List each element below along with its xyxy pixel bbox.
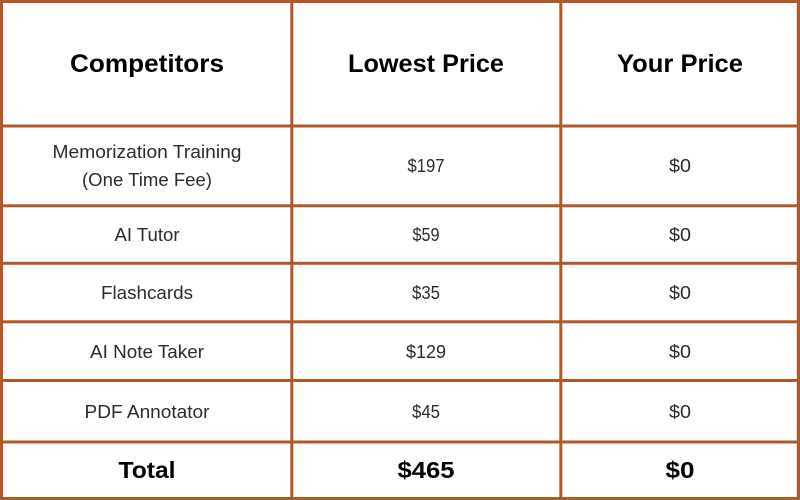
header row — [70, 50, 743, 78]
row: memorization training — [52, 142, 691, 190]
heading: competitors: Competitors — [70, 50, 224, 78]
row: total — [118, 457, 694, 483]
label: one time fee: (One Time Fee) — [82, 170, 212, 190]
your price value: $0 — [669, 342, 691, 362]
lowest price value: $197 — [408, 156, 444, 176]
lowest price value: $59 — [412, 225, 440, 245]
label: total: Total — [118, 457, 176, 483]
your price value: $0 — [669, 283, 691, 303]
row: ai tutor — [114, 225, 691, 245]
label: memorization training: Memorization Training — [52, 142, 242, 162]
heading: your price: Your Price — [617, 50, 743, 78]
lowest price value: $35 — [412, 283, 440, 303]
lowest price value: $45 — [412, 402, 440, 422]
lowest price value: $129 — [406, 342, 446, 362]
your price value: $0 — [669, 156, 691, 176]
row: pdf annotator — [84, 402, 691, 422]
your price value: $0 — [669, 225, 691, 245]
label: pdf annotator: PDF Annotator — [84, 402, 210, 422]
label: ai note taker: AI Note Taker — [90, 342, 204, 362]
label: flashcards: Flashcards — [101, 283, 193, 303]
heading: lowest price: Lowest Price — [348, 50, 504, 78]
your price value: $0 — [669, 402, 691, 422]
row: ai note taker — [90, 342, 691, 362]
label: ai tutor: AI Tutor — [114, 225, 180, 245]
your price total: $0 — [666, 457, 694, 483]
lowest price total: $465 — [398, 457, 455, 483]
row: flashcards — [101, 283, 691, 303]
